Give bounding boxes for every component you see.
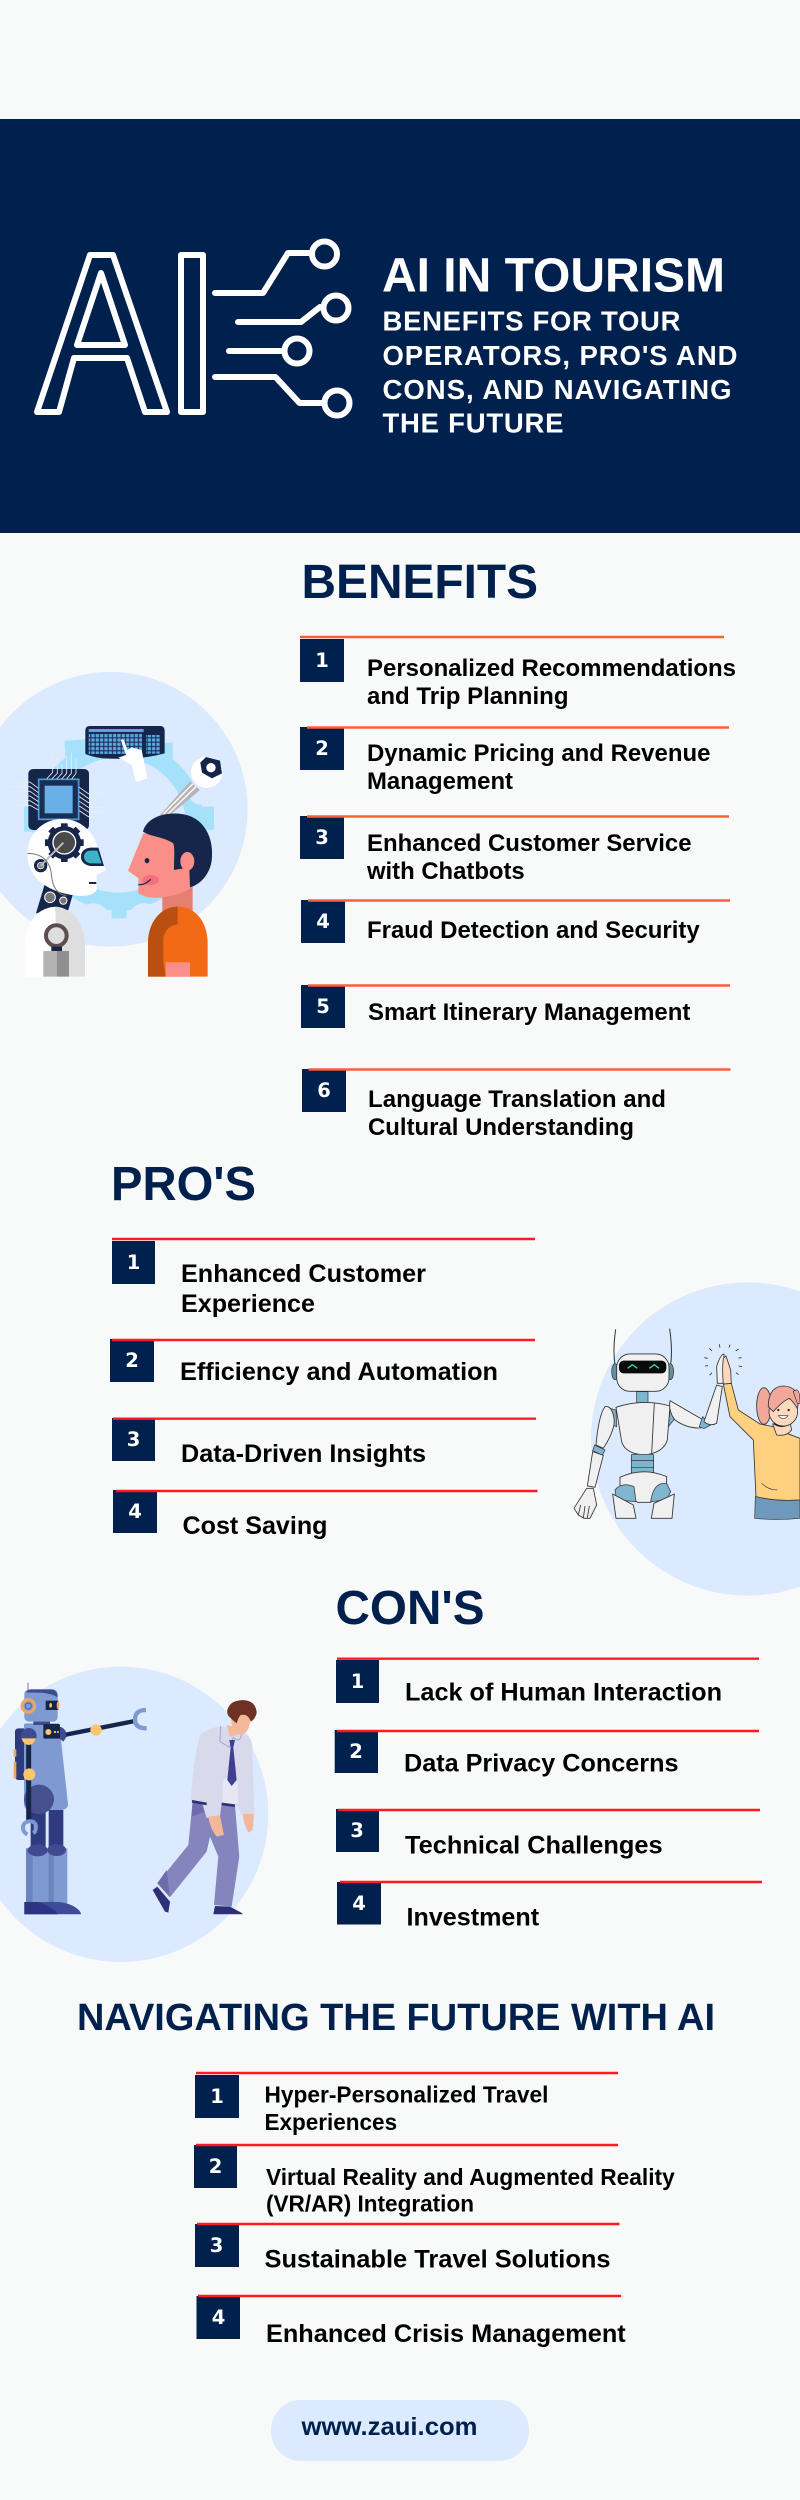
icon: man in orange shirt — [128, 813, 212, 977]
con 4: Investment — [406, 1904, 540, 1932]
icon: light blue gear — [24, 739, 214, 935]
benefit 2 — [300, 727, 729, 795]
benefit 3: Enhanced Customer Service — [367, 830, 692, 857]
con 3: 3 — [350, 1819, 364, 1842]
future item 1: Experiences — [264, 2109, 397, 2135]
con 3 — [336, 1809, 760, 1860]
benefit 5: Smart Itinerary Management — [368, 999, 690, 1026]
subtitle: BENEFITS FOR TOUR — [382, 306, 681, 337]
benefit 2: 2 — [315, 737, 329, 760]
con 2 — [335, 1730, 759, 1778]
pro 3: 3 — [127, 1428, 140, 1451]
future item 3 — [195, 2224, 620, 2274]
illustration: robot high-fiving woman — [574, 1282, 800, 1596]
heading: navigating the future: NAVIGATING THE FUTURE WITH AI — [77, 1997, 715, 2039]
benefit 6: Language Translation and — [368, 1086, 666, 1113]
icon: AI circuit logo — [37, 242, 350, 416]
con 2: Data Privacy Concerns — [404, 1750, 678, 1778]
pro 1 — [112, 1239, 535, 1318]
icon: dejected man — [153, 1700, 257, 1914]
benefit 2: Management — [367, 768, 513, 795]
subtitle: THE FUTURE — [382, 408, 564, 439]
benefit 1: Personalized Recommendations — [367, 655, 736, 682]
con 1: 1 — [351, 1670, 364, 1693]
icon: robot head and body — [25, 819, 106, 977]
benefit 6: Cultural Understanding — [368, 1114, 634, 1141]
benefit 6: 6 — [317, 1079, 331, 1102]
con 1: Lack of Human Interaction — [405, 1679, 722, 1707]
benefit 6 — [302, 1069, 730, 1141]
future item 1 — [195, 2073, 618, 2135]
panel: navigating the future — [77, 1997, 715, 2348]
illustration: robot and man facing each other — [0, 672, 248, 977]
con 1 — [336, 1659, 759, 1707]
future item 2: Virtual Reality and Augmented Reality — [266, 2164, 675, 2190]
panel: cons — [335, 1582, 762, 1932]
pro 1: 1 — [127, 1251, 140, 1274]
future item 1: 1 — [210, 2085, 224, 2108]
pro 4: 4 — [128, 1500, 142, 1523]
icon: woman in yellow sweater — [723, 1356, 800, 1519]
con 2: 2 — [349, 1740, 363, 1763]
benefit 1: and Trip Planning — [367, 683, 568, 710]
future item 2: 2 — [209, 2155, 222, 2178]
website pill: www.zaui.com — [300, 2413, 478, 2441]
subtitle — [382, 306, 738, 439]
benefit 2: Dynamic Pricing and Revenue — [367, 740, 710, 767]
icon: wrench and nut — [160, 757, 222, 817]
future item 2: (VR/AR) Integration — [266, 2191, 474, 2217]
illustration: robot pushing dejected man — [0, 1667, 268, 1962]
pro 2: Efficiency and Automation — [180, 1358, 498, 1386]
heading: pros: PRO'S — [111, 1158, 256, 1211]
pro 4: Cost Saving — [182, 1512, 328, 1540]
benefit 1: 1 — [315, 649, 329, 672]
con 4: 4 — [352, 1892, 366, 1915]
benefit 5: 5 — [316, 995, 330, 1018]
benefit 4: Fraud Detection and Security — [367, 917, 700, 944]
benefit 3: 3 — [315, 826, 329, 849]
panel: header banner — [0, 119, 800, 533]
subtitle: CONS, AND NAVIGATING — [382, 374, 732, 405]
future item 4 — [196, 2296, 626, 2348]
future item 2 — [194, 2145, 675, 2217]
benefit 4 — [301, 900, 730, 944]
icon: blue robot — [14, 1683, 147, 1914]
pro 1: Enhanced Customer — [181, 1260, 426, 1288]
benefit 4: 4 — [316, 910, 330, 933]
panel: pros — [110, 1158, 538, 1540]
title: AI IN TOURISM — [382, 250, 725, 303]
panel: benefits — [300, 556, 736, 1141]
heading: benefits: BENEFITS — [302, 556, 538, 609]
icon: sparkle lines — [704, 1344, 742, 1375]
pro 1: Experience — [181, 1290, 315, 1318]
heading: cons: CON'S — [336, 1582, 484, 1635]
pro 2 — [110, 1339, 535, 1386]
benefit 5 — [301, 985, 730, 1028]
benefit 3: with Chatbots — [366, 858, 525, 885]
con 4 — [337, 1882, 762, 1932]
benefit 1 — [300, 637, 736, 710]
icon: processor chip — [11, 753, 106, 830]
icon: robot — [574, 1329, 724, 1518]
pro 4 — [113, 1490, 538, 1540]
pro 2: 2 — [125, 1349, 139, 1372]
con 3: Technical Challenges — [405, 1832, 663, 1860]
subtitle: OPERATORS, PRO'S AND — [382, 340, 738, 371]
future item 1: Hyper-Personalized Travel — [264, 2082, 548, 2108]
future item 3: Sustainable Travel Solutions — [264, 2246, 610, 2274]
future item 4: Enhanced Crisis Management — [266, 2320, 626, 2348]
future item 3: 3 — [210, 2234, 223, 2257]
future item 4: 4 — [212, 2306, 225, 2329]
benefit 3 — [300, 816, 729, 885]
icon: keyboard and hand — [85, 726, 165, 782]
pro 3: Data-Driven Insights — [181, 1440, 426, 1468]
website pill — [271, 2400, 529, 2461]
pro 3 — [112, 1418, 536, 1468]
